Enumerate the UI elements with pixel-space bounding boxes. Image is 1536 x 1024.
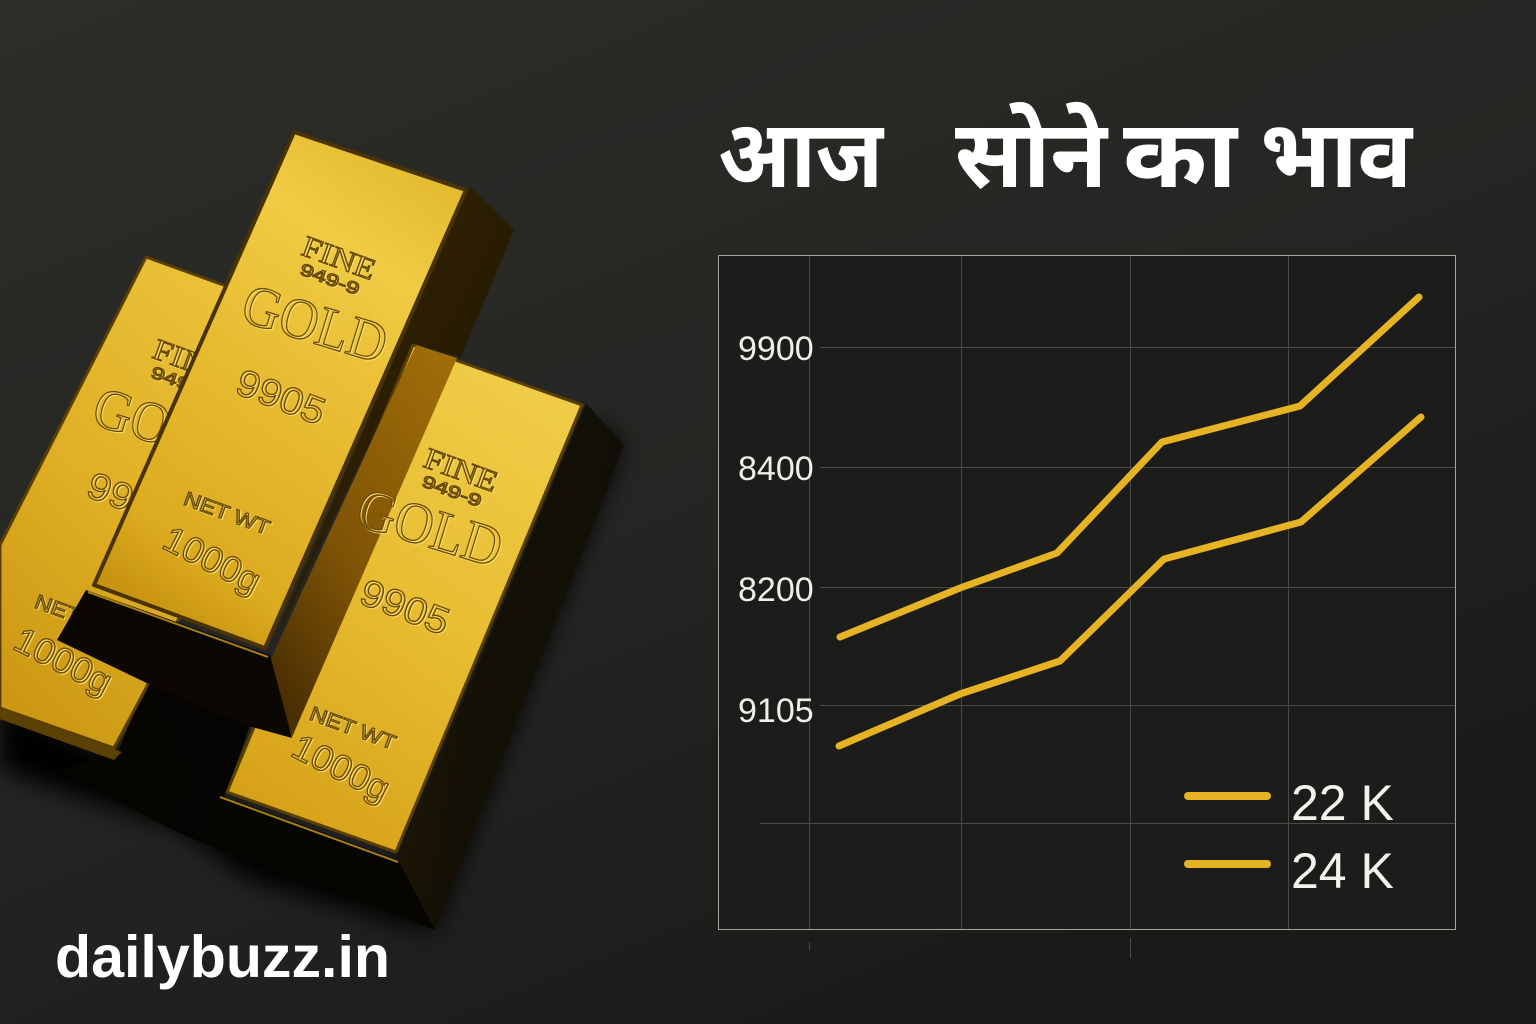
right bar engraving: 1000g: [286, 726, 397, 809]
shadow gap between bars: [118, 675, 255, 842]
title: सोने: [955, 102, 1109, 208]
left bar engraving: [8, 333, 246, 702]
22 K data line: [840, 297, 1419, 637]
title: भाव: [1260, 102, 1414, 208]
right bar engraving: GOLD: [350, 475, 510, 580]
right bar engraving: [286, 442, 510, 809]
y-axis labels: 9900: [738, 330, 814, 368]
right gold bar: [200, 345, 624, 930]
gold bars illustration: [0, 132, 624, 935]
left bar engraving: GOLD: [86, 374, 246, 479]
y-axis labels: [738, 330, 814, 730]
title: का: [1123, 102, 1239, 208]
left bar engraving: 9905: [81, 465, 182, 537]
centre bar engraving: 9905: [230, 362, 331, 434]
title: आज: [718, 102, 885, 208]
brand text: dailybuzz.in: [55, 924, 390, 990]
left bar engraving: 1000g: [8, 619, 119, 702]
24 K data line: [839, 417, 1421, 746]
right bar bottom rim: [220, 797, 398, 862]
centre gold bar: [57, 132, 466, 738]
bars shadow: [0, 420, 622, 935]
right bar engraving: 949-9: [419, 472, 484, 511]
centre bar engraving: [157, 230, 395, 601]
right bar engraving: NET WT: [307, 703, 399, 755]
centre bar engraving: NET WT: [181, 488, 273, 540]
left bar engraving: FINE: [148, 333, 231, 390]
y-axis labels: 8200: [738, 571, 814, 609]
centre bar right side: [268, 188, 514, 655]
y-axis labels: 8400: [738, 450, 814, 488]
right bar engraving: 9905: [354, 572, 455, 644]
legend: 24 K: [1291, 843, 1394, 899]
centre bar bottom rim: [88, 592, 268, 657]
right bar shaded sliver: [269, 345, 457, 737]
line chart: [718, 256, 1456, 958]
centre bar engraving: GOLD: [235, 271, 395, 376]
chart frame: [718, 256, 1456, 930]
centre bar engraving: 949-9: [297, 260, 362, 299]
centre bar engraving: 1000g: [157, 518, 268, 601]
left bar engraving: NET WT: [32, 591, 124, 643]
left gold bar: [0, 257, 320, 826]
legend: [1188, 775, 1394, 899]
title: [718, 102, 1414, 208]
left bar engraving: 949-9: [148, 363, 213, 402]
legend: 22 K: [1291, 775, 1394, 831]
right bar engraving: FINE: [419, 442, 502, 499]
centre bar engraving: FINE: [297, 230, 380, 287]
y-axis labels: 9105: [738, 692, 814, 730]
